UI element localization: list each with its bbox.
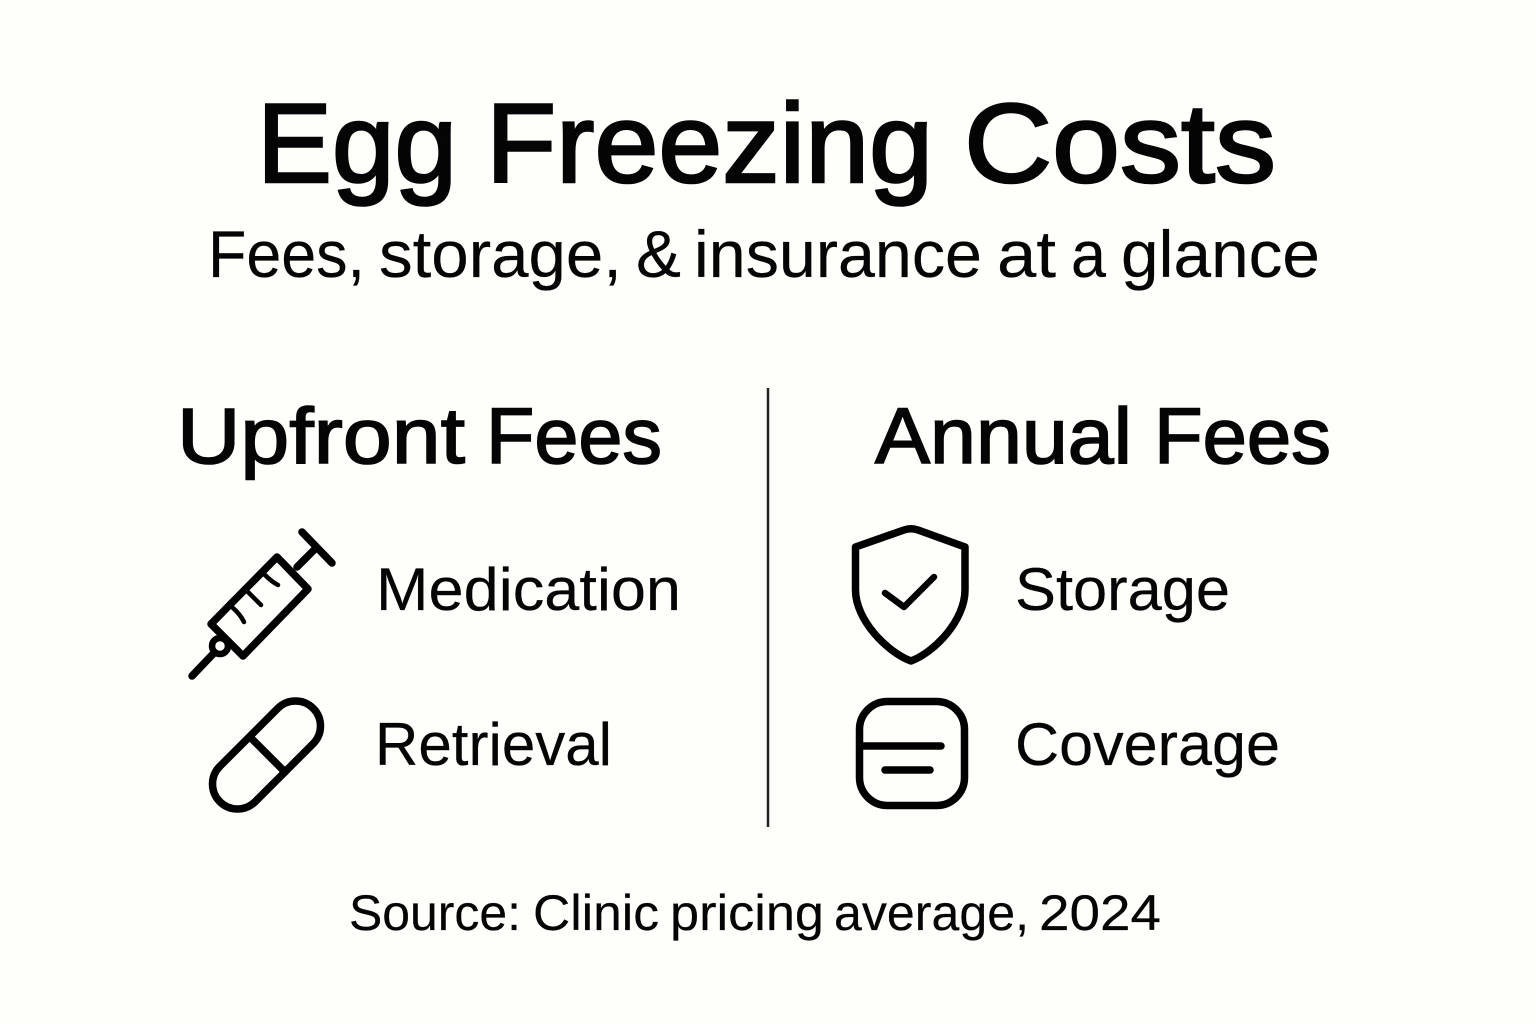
subtitle: &: [636, 217, 681, 291]
title: Egg: [257, 81, 457, 206]
source note: average,: [834, 885, 1029, 941]
source note: Clinic: [533, 885, 659, 941]
subtitle: a: [1071, 217, 1106, 291]
subtitle: storage,: [379, 217, 622, 291]
source note: Source:: [349, 885, 521, 941]
title: Costs: [964, 81, 1276, 206]
panel: annual fees: [856, 391, 1331, 806]
source note: [349, 885, 1161, 941]
label: coverage: Coverage: [1015, 711, 1280, 778]
heading: upfront fees: [177, 391, 662, 480]
heading: annual fees: Annual: [875, 391, 1132, 480]
source note: pricing: [670, 885, 824, 941]
label: storage: Storage: [1015, 556, 1230, 623]
icon: shield with check: [856, 529, 965, 661]
center divider: [767, 388, 769, 827]
panel: upfront fees: [177, 391, 681, 819]
icon: pill capsule: [202, 691, 331, 819]
subtitle: insurance: [694, 217, 982, 291]
source note: 2024: [1039, 885, 1161, 941]
label: retrieval: Retrieval: [375, 711, 612, 778]
subtitle: Fees,: [208, 217, 365, 291]
subtitle: at: [997, 217, 1056, 291]
title: Freezing: [486, 81, 933, 206]
heading: annual fees: [875, 391, 1331, 480]
subtitle: [208, 217, 1320, 291]
title: [257, 81, 1276, 206]
subtitle: glance: [1121, 217, 1320, 291]
heading: annual fees: Fees: [1154, 391, 1331, 480]
label: medication: Medication: [376, 556, 681, 623]
icon: syringe: [192, 532, 332, 676]
heading: upfront fees: Fees: [486, 391, 662, 480]
heading: upfront fees: Upfront: [177, 391, 465, 480]
icon: coverage card: [860, 702, 964, 806]
